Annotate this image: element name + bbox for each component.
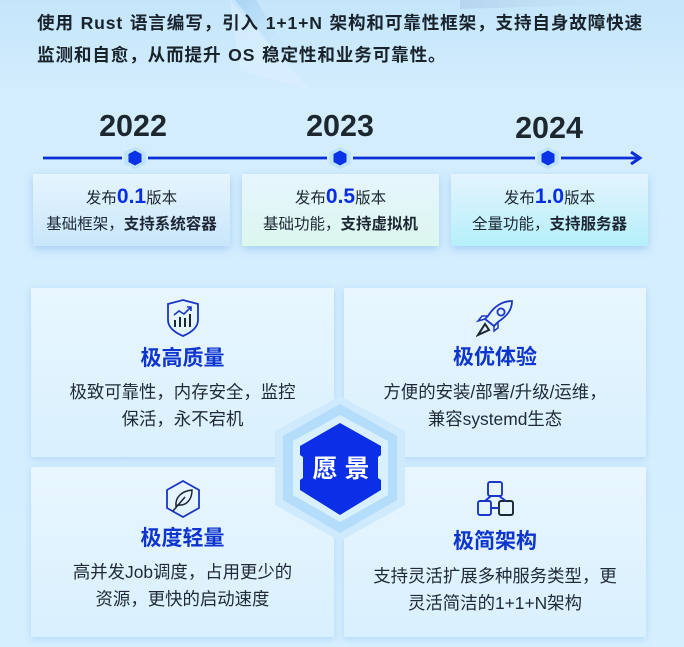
timeline arrow [43, 147, 643, 169]
panel: 极度轻量 [31, 467, 334, 637]
intro text [37, 13, 643, 65]
card: 2022 [33, 174, 230, 246]
icon: feather hexagon [166, 480, 200, 518]
panel: 极简架构 [344, 467, 646, 637]
heading: 极度轻量 [140, 527, 224, 550]
card: 2023: 基础功能，支持虚拟机 [263, 216, 418, 233]
timeline [99, 109, 583, 145]
description [69, 382, 296, 429]
heading: 极简架构 [453, 530, 537, 553]
intro text: 使用 Rust 语言编写，引入 1+1+N 架构和可靠性框架，支持自身故障快速 [37, 13, 643, 33]
year 2023: 2023 [306, 109, 374, 143]
year 2024: 2024 [515, 111, 583, 145]
description: 极致可靠性，内存安全，监控 [69, 382, 296, 402]
label: 愿 景 [313, 455, 369, 483]
card: 2024: 全量功能，支持服务器 [472, 216, 627, 233]
description [73, 562, 292, 609]
description: 资源，更快的启动速度 [96, 589, 269, 609]
card: 2022: 基础框架，支持系统容器 [46, 216, 217, 233]
description: 兼容systemd生态 [428, 409, 562, 429]
card: 2022: 发布0.1版本 [86, 185, 177, 208]
card: 2024: 发布1.0版本 [504, 185, 595, 208]
heading: 极优体验 [453, 346, 537, 369]
description [373, 566, 617, 613]
description: 支持灵活扩展多种服务类型，更 [373, 566, 617, 586]
description: 保活，永不宕机 [122, 409, 243, 429]
description: 灵活简洁的1+1+N架构 [408, 593, 582, 613]
panel: 极优体验 [344, 288, 646, 457]
year 2022: 2022 [99, 109, 167, 143]
card: 2023: 发布0.5版本 [295, 185, 386, 208]
panel: 极高质量 [31, 288, 334, 457]
intro text: 监测和自愈，从而提升 OS 稳定性和业务可靠性。 [37, 45, 446, 65]
vision hexagon badge [275, 398, 405, 539]
icon: connected blocks [477, 481, 514, 516]
card: 2024 [451, 174, 648, 246]
heading: 极高质量 [140, 347, 224, 370]
description: 方便的安装/部署/升级/运维， [383, 382, 607, 402]
icon: shield chart [167, 299, 199, 337]
card: 2023 [242, 174, 439, 246]
icon: rocket [476, 300, 513, 337]
description: 高并发Job调度，占用更少的 [73, 562, 292, 582]
description [383, 382, 607, 429]
